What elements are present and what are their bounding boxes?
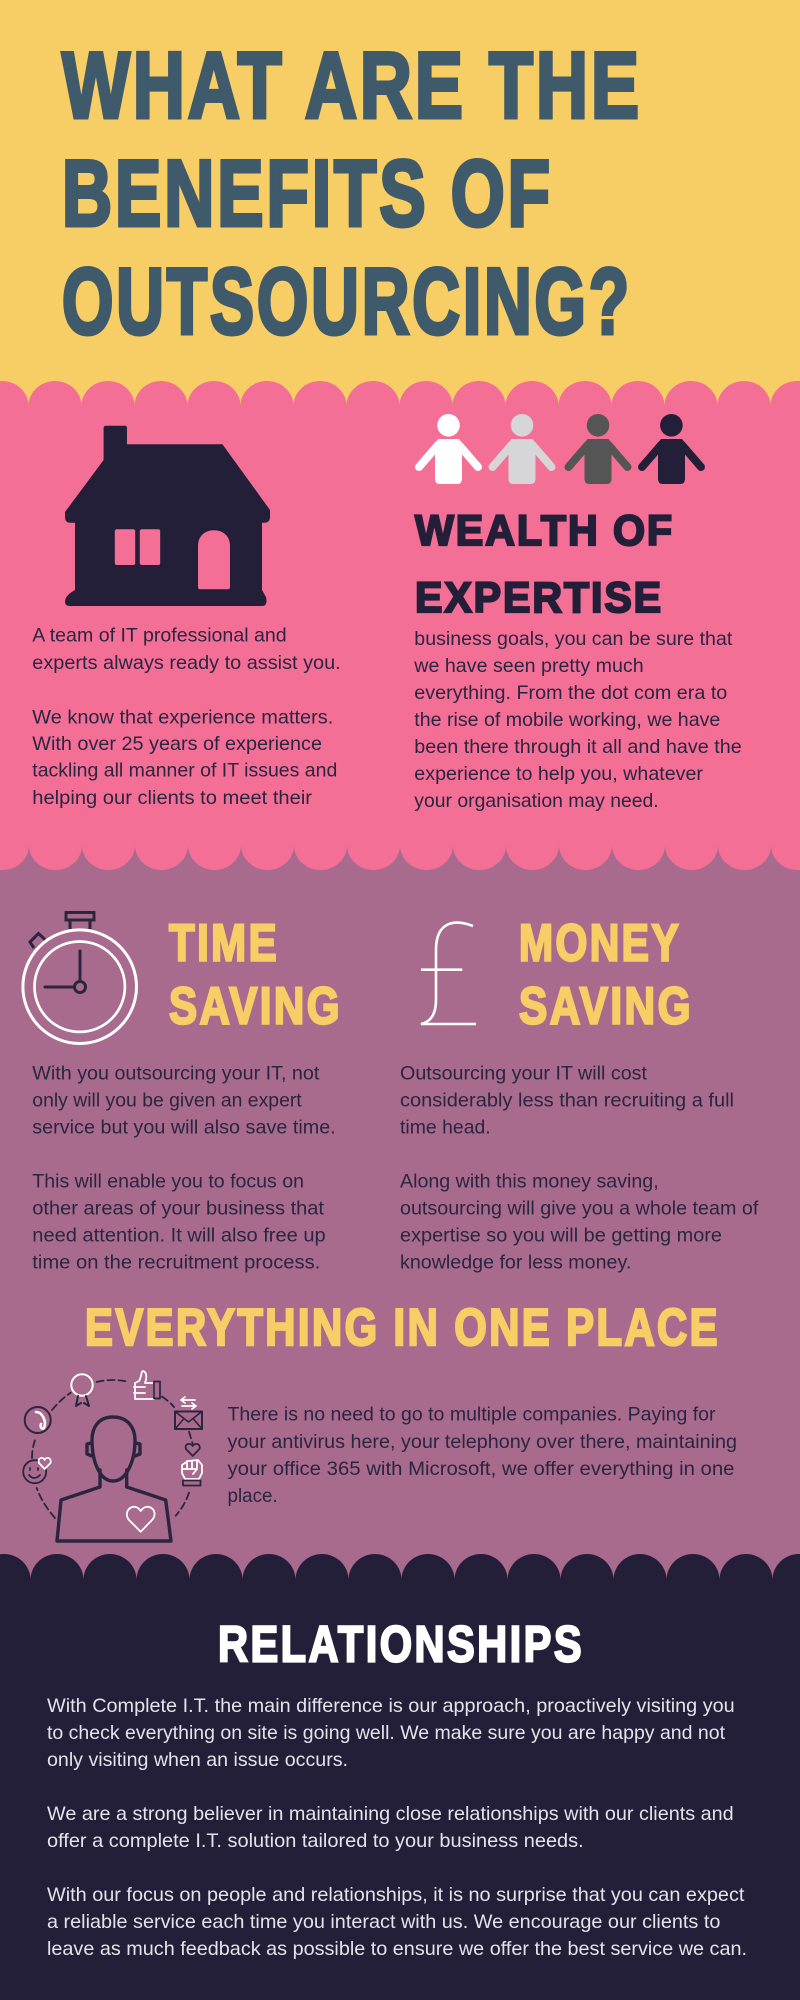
text: money saving body: Along with this money saving, <box>400 1170 659 1192</box>
text: money saving body: outsourcing will give you a whole team of <box>400 1197 759 1219</box>
text: time saving body: time on the recruitment process. <box>32 1251 320 1273</box>
title: WHAT ARE THE <box>62 32 642 138</box>
text: relationships body: to check everything on site is going well. We make sure you are happy and not <box>47 1722 726 1744</box>
text: relationships body: a reliable service each time you interact with us. We encourage our clients to <box>47 1911 721 1933</box>
text: time saving body: With you outsourcing your IT, not <box>32 1062 320 1084</box>
text: left column: With over 25 years of experience <box>32 733 322 755</box>
text: time saving body <box>32 1062 336 1273</box>
text: right column: been there through it all and have the <box>414 736 742 758</box>
text: right column: your organisation may need. <box>414 790 659 812</box>
heading: time saving: TIME <box>169 914 279 972</box>
text: left column: experts always ready to assist you. <box>32 652 341 674</box>
heading: money saving: MONEY <box>519 914 681 972</box>
icon: house <box>65 426 270 606</box>
text: time saving body: other areas of your business that <box>32 1197 325 1219</box>
text: left column: We know that experience matters. <box>32 706 333 728</box>
text: left column: A team of IT professional and <box>32 625 287 647</box>
title <box>62 32 642 354</box>
text: time saving body: service but you will also save time. <box>32 1116 336 1138</box>
panel: relationships <box>0 1554 800 2000</box>
text: right column: business goals, you can be sure that <box>414 628 733 650</box>
text: money saving body: knowledge for less money. <box>400 1251 631 1273</box>
text: right column: experience to help you, whatever <box>414 763 704 785</box>
heading: time saving: SAVING <box>169 978 342 1036</box>
text: time saving body: need attention. It will also free up <box>32 1224 326 1246</box>
text: right column: everything. From the dot com era to <box>414 682 727 704</box>
text: money saving body <box>400 1062 759 1273</box>
text: everything in one place body <box>228 1404 737 1507</box>
title: BENEFITS OF <box>62 140 553 246</box>
text: money saving body: considerably less than recruiting a full <box>400 1089 734 1111</box>
text: money saving body: time head. <box>400 1116 491 1138</box>
text: money saving body: expertise so you will be getting more <box>400 1224 722 1246</box>
text: right column: we have seen pretty much <box>413 655 644 677</box>
text: time saving body: only will you be given an expert <box>32 1089 302 1111</box>
heading: money saving <box>519 914 693 1036</box>
text: money saving body: Outsourcing your IT will cost <box>400 1062 648 1084</box>
panel: title header <box>0 0 800 420</box>
icon: person with surrounding icons <box>23 1371 202 1541</box>
panel: wealth of expertise <box>0 381 800 870</box>
text: right column: the rise of mobile working, we have <box>414 709 720 731</box>
text: relationships body: leave as much feedback as possible to ensure we offer the best service we can. <box>47 1938 747 1960</box>
panel: everything in one place <box>23 1299 737 1541</box>
text: relationships body <box>47 1695 747 1960</box>
text: time saving body: This will enable you to focus on <box>32 1170 304 1192</box>
text: relationships body: With our focus on people and relationships, it is no surprise that you can expect <box>47 1884 745 1906</box>
text: everything in one place body: your antivirus here, your telephony over there, maintaining <box>228 1431 737 1453</box>
text: relationships body: only visiting when an issue occurs. <box>47 1749 348 1771</box>
text: relationships body: offer a complete I.T. solution tailored to your business needs. <box>47 1830 584 1852</box>
text: everything in one place body: place. <box>228 1485 278 1507</box>
text: left column: helping our clients to meet their <box>32 787 313 809</box>
heading: wealth of expertise <box>415 507 674 622</box>
icon: pound sign <box>421 923 476 1024</box>
text: everything in one place body: your office 365 with Microsoft, we offer everything in one <box>228 1458 734 1480</box>
heading: time saving <box>169 914 342 1036</box>
icon: four people <box>419 414 701 484</box>
heading: money saving: SAVING <box>519 978 693 1036</box>
text: right column <box>413 628 742 812</box>
text: relationships body: We are a strong believer in maintaining close relationships with our clients and <box>47 1803 734 1825</box>
heading: relationships: RELATIONSHIPS <box>218 1616 584 1672</box>
text: relationships body: With Complete I.T. the main difference is our approach, proactively visiting you <box>47 1695 735 1717</box>
icon: stopwatch <box>23 912 137 1044</box>
text: everything in one place body: There is no need to go to multiple companies. Paying for <box>228 1404 716 1426</box>
heading: wealth of expertise: EXPERTISE <box>415 574 663 622</box>
panel: money saving <box>400 914 759 1273</box>
heading: wealth of expertise: WEALTH OF <box>415 507 674 555</box>
panel: mauve background <box>0 840 800 1590</box>
text: left column <box>32 625 341 809</box>
text: left column: tackling all manner of IT issues and <box>32 760 337 782</box>
panel: time saving <box>23 912 342 1273</box>
